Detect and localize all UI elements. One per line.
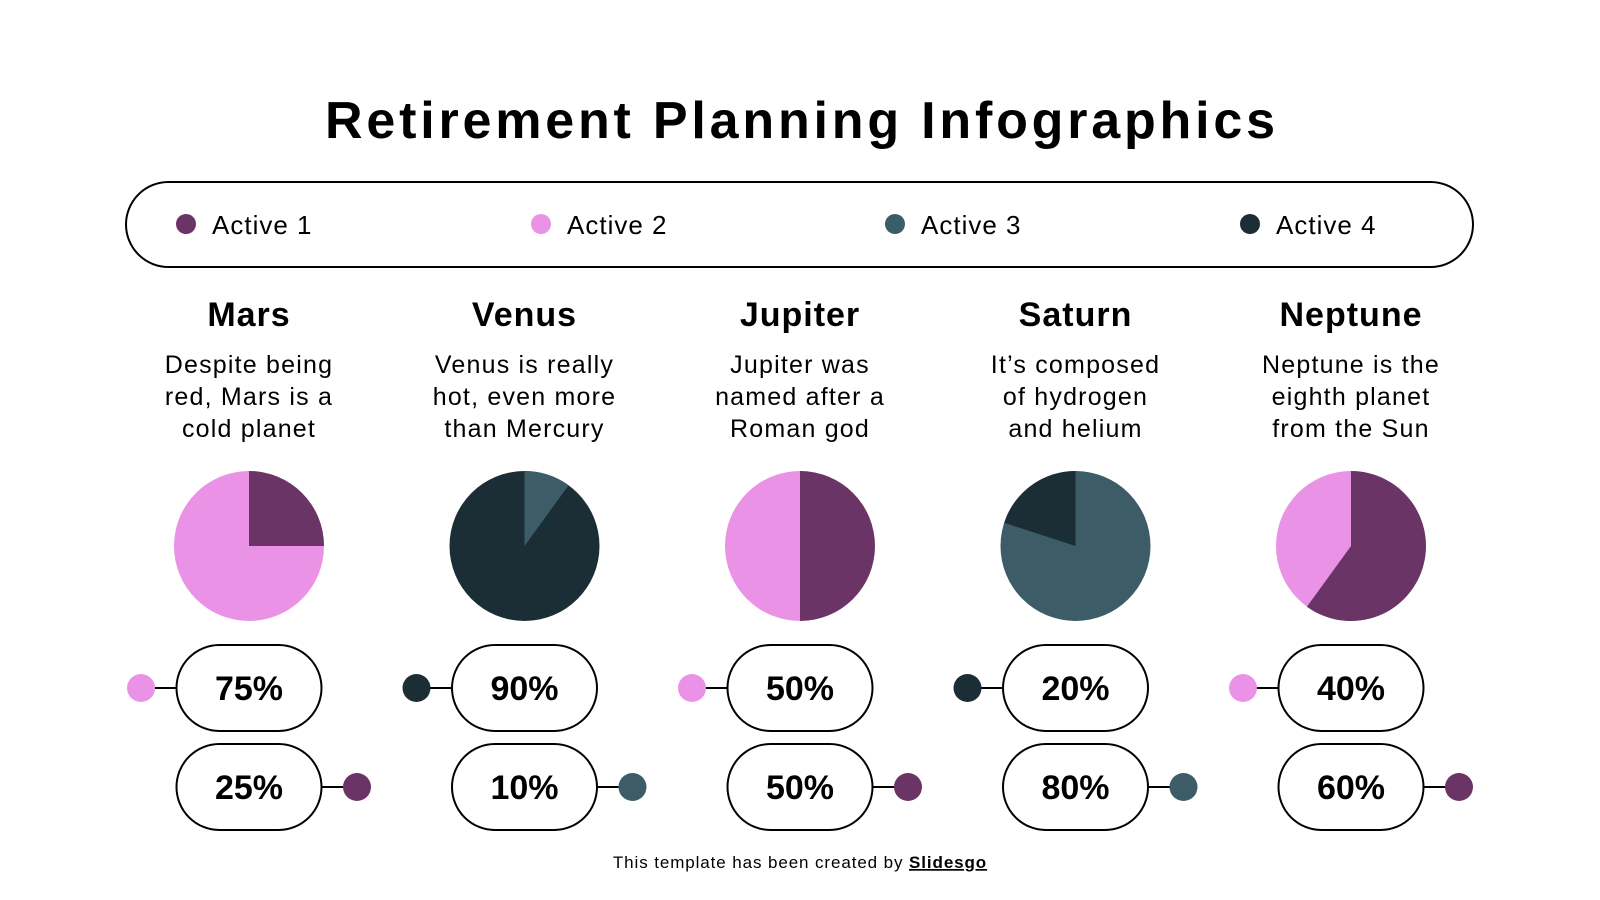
column: Saturn: and helium <box>1008 415 1143 443</box>
column: Jupiter: named after a <box>715 383 885 411</box>
column: Saturn: Saturn <box>1019 296 1132 334</box>
column: Jupiter: Jupiter was <box>730 351 870 379</box>
legend <box>126 182 1473 267</box>
column: Saturn: 80% <box>1041 769 1110 807</box>
column: Jupiter: 50% <box>766 670 834 708</box>
column: Venus: 90% <box>490 670 559 708</box>
column: Saturn: It’s composed <box>991 351 1160 379</box>
column: Venus: Venus <box>472 296 577 334</box>
column: Jupiter: Jupiter <box>740 296 860 334</box>
column: Jupiter <box>678 296 922 830</box>
column: Saturn: 20% <box>1041 670 1110 708</box>
column: Mars: Mars <box>207 296 291 334</box>
column: Saturn <box>954 296 1198 830</box>
column: Venus <box>402 296 646 830</box>
column: Saturn: of hydrogen <box>1003 383 1148 411</box>
column: Venus: Venus is really <box>435 351 614 379</box>
column: Mars: 75% <box>215 670 283 708</box>
column: Mars <box>127 296 371 830</box>
column: Neptune: 40% <box>1317 670 1385 708</box>
column: Neptune: eighth planet <box>1272 383 1430 411</box>
column: Neptune: 60% <box>1317 769 1385 807</box>
title: Retirement Planning Infographics <box>325 92 1275 150</box>
column: Neptune: Neptune <box>1280 296 1422 334</box>
column: Mars: cold planet <box>182 415 316 443</box>
column: Venus: hot, even more <box>433 383 616 411</box>
column: Neptune: from the Sun <box>1272 415 1430 443</box>
column: Neptune: Neptune is the <box>1262 351 1440 379</box>
column: Mars: Despite being <box>165 351 333 379</box>
column: Mars: 25% <box>215 769 283 807</box>
column: Mars: red, Mars is a <box>165 383 333 411</box>
legend: Active 4 <box>1276 210 1376 240</box>
column: Venus: 10% <box>490 769 559 807</box>
column: Jupiter: 50% <box>766 769 834 807</box>
column: Jupiter: Roman god <box>730 415 870 443</box>
legend: Active 2 <box>567 210 668 240</box>
legend: Active 1 <box>212 210 312 240</box>
footer: This template has been created by Slidesgo <box>613 853 987 872</box>
legend: Active 3 <box>921 210 1022 240</box>
column: Neptune <box>1229 296 1473 830</box>
column: Venus: than Mercury <box>444 415 605 443</box>
